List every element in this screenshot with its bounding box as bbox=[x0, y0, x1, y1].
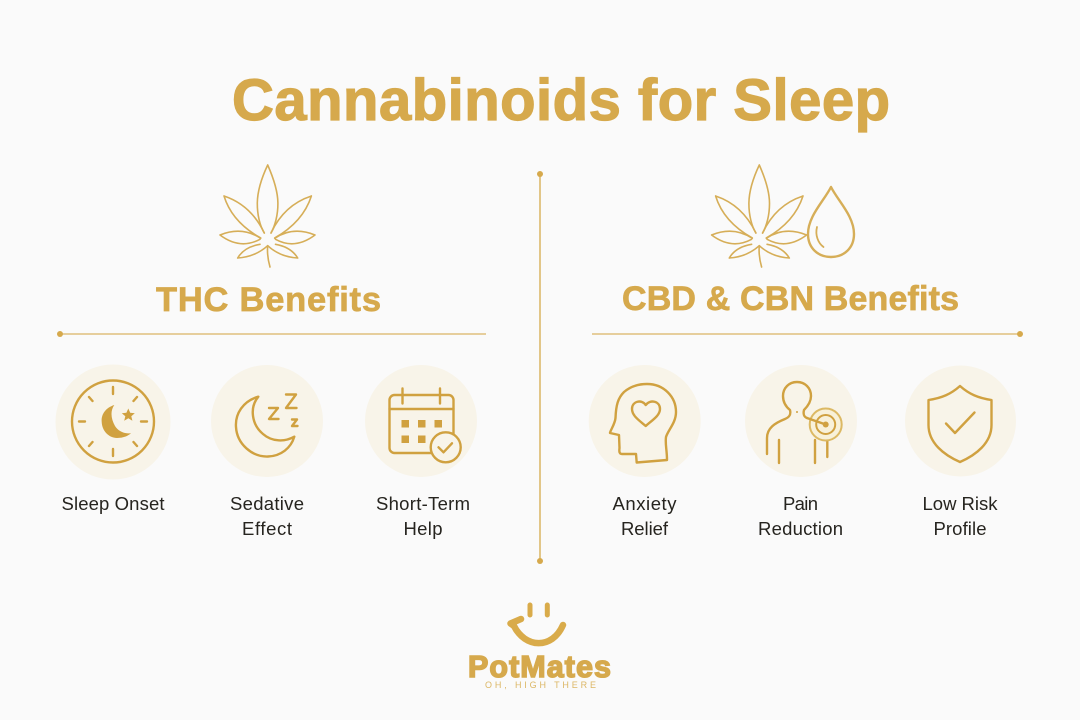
item: Sleep Onset bbox=[56, 364, 170, 514]
item: Sleep Onset: Sleep Onset bbox=[62, 493, 164, 514]
logo: PotMates bbox=[468, 605, 611, 690]
icon: head with heart bbox=[610, 384, 676, 462]
icon: shield with check bbox=[928, 386, 992, 462]
icon: cannabis leaf bbox=[220, 165, 315, 267]
item: Sedative Effect bbox=[211, 365, 323, 539]
icon: clock with moon bbox=[72, 380, 154, 462]
item: Pain Reduction bbox=[745, 365, 857, 539]
tagline: OH, HIGH THERE bbox=[485, 680, 596, 690]
item: Sedative Effect: Sedative bbox=[230, 493, 304, 514]
title: Cannabinoids for Sleep bbox=[232, 68, 890, 133]
item: Anxiety Relief: Anxiety bbox=[612, 493, 677, 514]
item: Short-Term Help: Help bbox=[404, 518, 442, 539]
item: Low Risk Profile: Profile bbox=[934, 518, 986, 539]
wordmark: PotMates bbox=[468, 650, 611, 684]
icon: cannabis leaf and oil drop bbox=[712, 165, 854, 267]
icon: calendar with check bbox=[390, 388, 461, 462]
item: Anxiety Relief bbox=[589, 365, 701, 539]
divider: THC bbox=[57, 331, 486, 337]
item: Short-Term Help bbox=[365, 365, 477, 539]
item: Sedative Effect: Effect bbox=[242, 518, 292, 539]
icon: smiley bbox=[510, 605, 563, 643]
center divider bbox=[537, 171, 543, 564]
panel: CBD and CBN benefits bbox=[589, 165, 1023, 539]
item: Short-Term Help: Short-Term bbox=[376, 493, 470, 514]
item: Pain Reduction: Pain bbox=[783, 493, 818, 514]
icon: body with pain target bbox=[767, 382, 842, 463]
item: Anxiety Relief: Relief bbox=[621, 518, 669, 539]
heading: THC Benefits: THC Benefits bbox=[156, 281, 381, 319]
item: Low Risk Profile: Low Risk bbox=[922, 493, 998, 514]
panel: THC benefits bbox=[56, 165, 486, 539]
item: Low Risk Profile bbox=[905, 366, 1016, 539]
heading: CBD & CBN Benefits: CBD & CBN Benefits bbox=[622, 280, 959, 318]
divider: CBD bbox=[592, 331, 1023, 337]
item: Pain Reduction: Reduction bbox=[758, 518, 843, 539]
icon: moon and Z letters bbox=[236, 394, 298, 457]
